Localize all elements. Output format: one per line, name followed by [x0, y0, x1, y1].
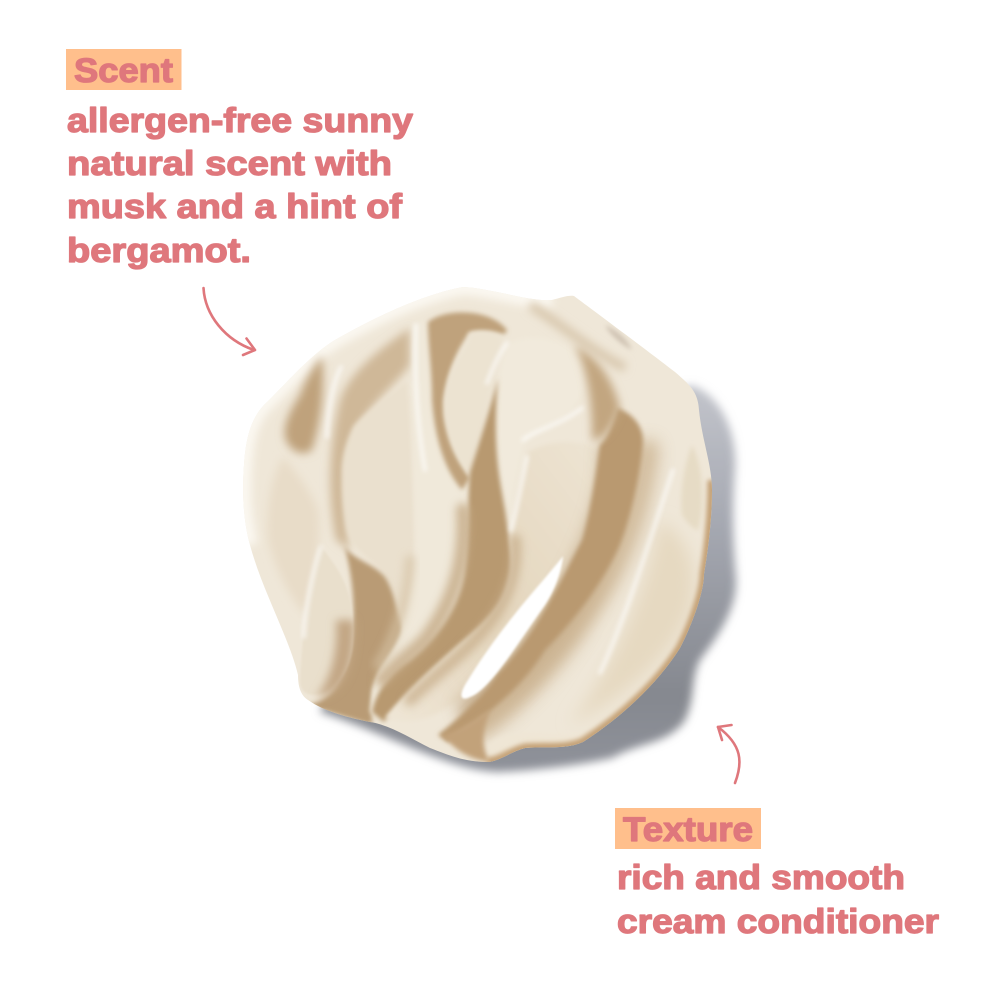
top-left fold shadow: [285, 356, 323, 453]
centre dark band: [372, 378, 511, 722]
scent label highlight: [66, 49, 182, 90]
second fold shade: [330, 328, 410, 550]
far right edge pool: [681, 445, 702, 530]
scent description: [67, 102, 413, 270]
upper right fold: [575, 345, 620, 440]
left inner pool: [268, 457, 319, 615]
top right ridge shade: [530, 305, 625, 368]
main gloss highlight: [461, 556, 563, 699]
arrow: scent to cream: [204, 288, 255, 355]
cream cast shadow: [320, 385, 736, 772]
cream swatch: [230, 270, 736, 780]
right dark band: [438, 408, 643, 742]
outer rim light: [243, 287, 552, 545]
rim shadow lower right: [487, 480, 712, 762]
scent description: musk and a hint of: [67, 188, 403, 226]
central lobe: [385, 442, 600, 721]
lower-left lobe: [300, 545, 353, 695]
upper centre pool: [444, 331, 503, 476]
scent description: allergen-free sunny: [67, 102, 413, 140]
scent heading: Scent: [74, 52, 173, 90]
centre-left pool: [340, 386, 412, 593]
bottom lobe: [514, 727, 604, 752]
texture description: rich and smooth: [617, 859, 905, 897]
texture description: [617, 859, 939, 941]
lobe base shading: [316, 620, 354, 698]
scent description: bergamot.: [67, 232, 251, 270]
right band outer shade: [480, 450, 648, 728]
lower-left dark band: [305, 545, 404, 725]
central ridge: [367, 624, 407, 716]
scent description: natural scent with: [67, 145, 392, 183]
arrow: texture to cream: [718, 725, 739, 783]
right-centre pool: [495, 338, 583, 530]
texture label highlight: [615, 808, 761, 849]
right dark band soft halo: [449, 432, 608, 722]
centre band soft halos: [378, 510, 515, 700]
top arch shadow: [428, 312, 507, 490]
top edge grey smudge: [605, 325, 632, 350]
panel: texture callout: [615, 808, 939, 941]
panel: scent callout: [66, 49, 413, 270]
texture heading: Texture: [623, 811, 753, 849]
soft highlight strokes: [304, 325, 673, 673]
lower right lobes shading: [580, 524, 696, 716]
cream body: [243, 287, 712, 762]
texture description: cream conditioner: [617, 903, 939, 941]
bottom tan fold: [442, 710, 490, 762]
